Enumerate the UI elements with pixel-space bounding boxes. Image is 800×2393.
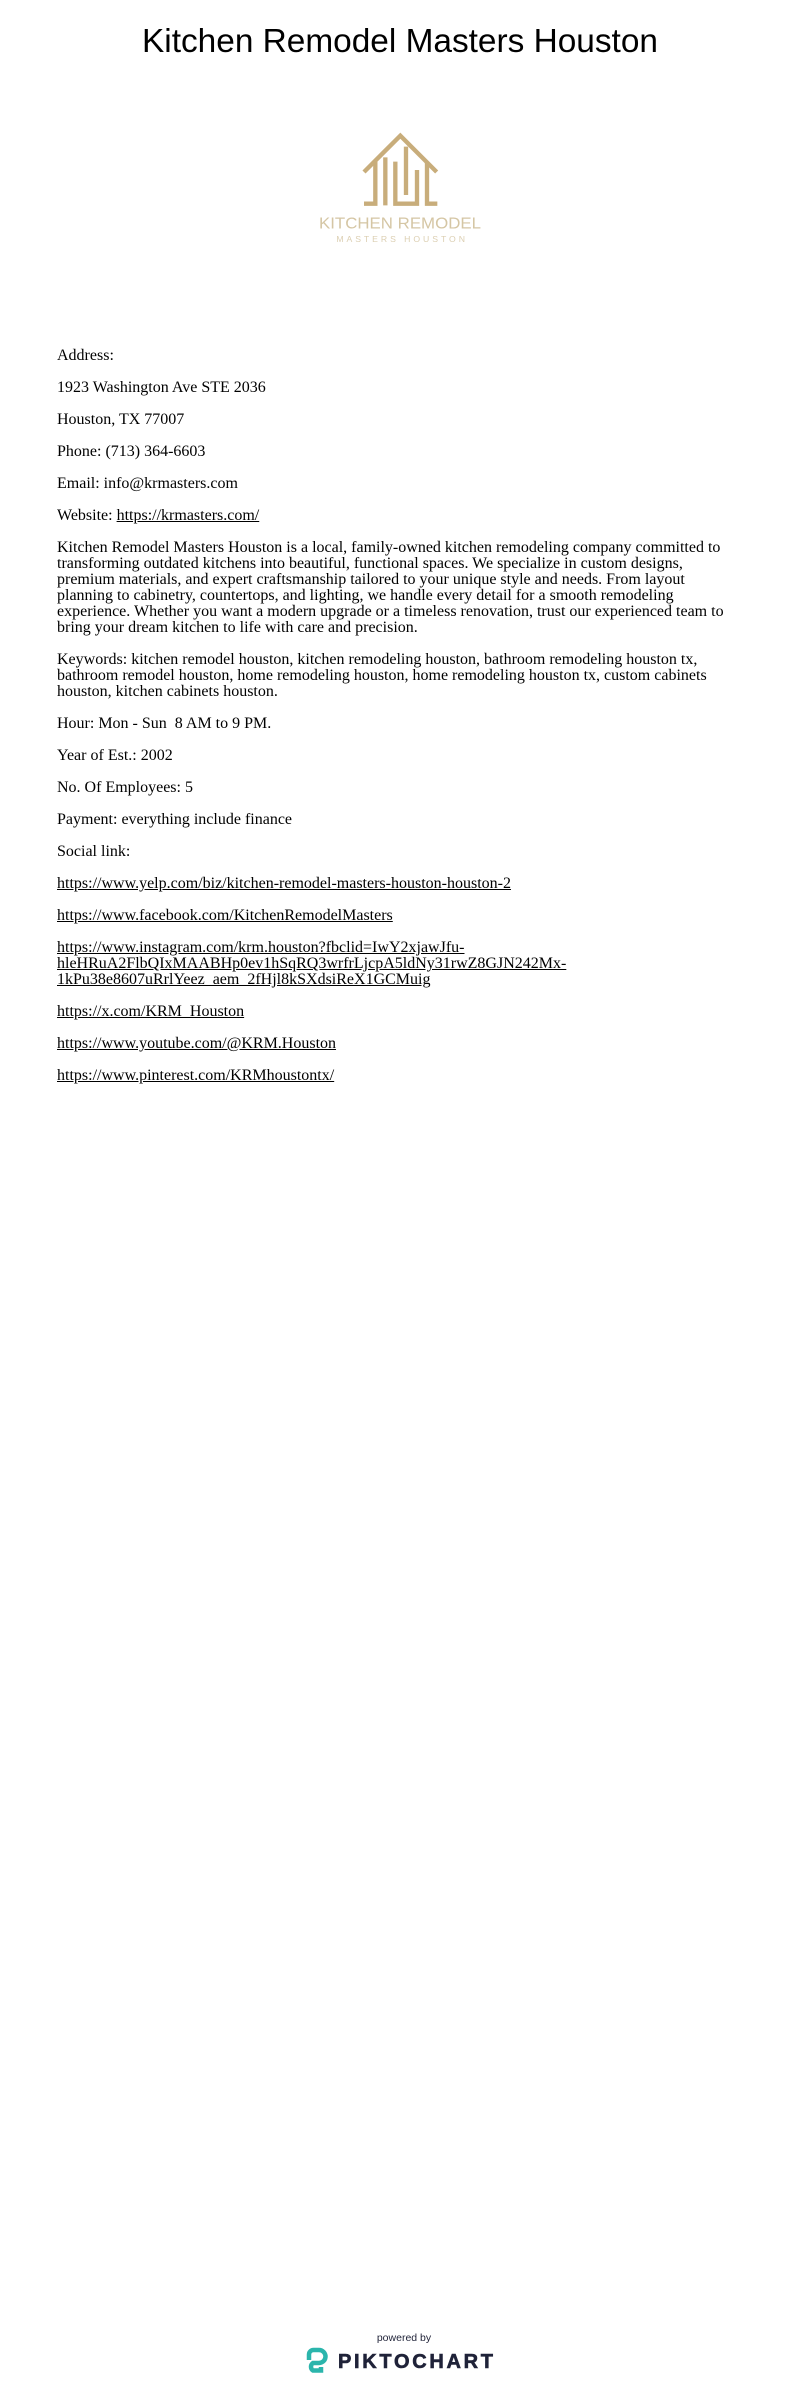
text block: business details: https://www.yelp.com/biz/kitchen-remodel-masters-houston-houston-2 xyxy=(57,875,511,892)
text block: business details: transforming outdated kitchens into beautiful, functional spaces. We specialize in custom designs, xyxy=(57,555,683,572)
text block: business details: bathroom remodel houston, home remodeling houston, home remodeling houston tx, custom cabinets xyxy=(57,667,707,684)
title: Kitchen Remodel Masters Houston xyxy=(142,23,658,60)
text block: business details: https://www.pinterest.com/KRMhoustontx/ xyxy=(57,1067,334,1084)
text block: business details: Houston, TX 77007 xyxy=(57,411,184,428)
text block: business details: Phone: (713) 364-6603 xyxy=(57,443,205,460)
text block: business details: planning to cabinetry, countertops, and lighting, we handle every detail for a smooth remodeling xyxy=(57,587,674,604)
footer: powered by Piktochart: powered by xyxy=(377,2332,432,2344)
text block: business details: Hour: Mon - Sun 8 AM to 9 PM. xyxy=(57,715,271,732)
text block: business details: premium materials, and expert craftsmanship tailored to your unique style and needs. From layout xyxy=(57,571,685,588)
text block: business details xyxy=(57,347,724,1084)
text block: business details: 1kPu38e8607uRrlYeez_aem_2fHjl8kSXdsiReX1GCMuig xyxy=(57,971,430,988)
icon: Piktochart mark xyxy=(309,2350,326,2370)
icon: kitchen remodel logo: KITCHEN REMODEL xyxy=(319,215,481,232)
text block: business details: https://x.com/KRM_Houston xyxy=(57,1003,244,1020)
text block: business details: Payment: everything include finance xyxy=(57,811,292,828)
text block: business details: No. Of Employees: 5 xyxy=(57,779,193,796)
text block: business details: Email: info@krmasters.com xyxy=(57,475,238,492)
text block: business details: Website: https://krmasters.com/ xyxy=(57,507,259,524)
text block: business details: Kitchen Remodel Masters Houston is a local, family-owned kitchen remodeling company committed to xyxy=(57,539,720,556)
text block: business details: houston, kitchen cabinets houston. xyxy=(57,683,278,700)
footer: powered by Piktochart: PIKTOCHART xyxy=(338,2351,493,2373)
text block: business details: Address: xyxy=(57,347,114,364)
text block: business details: https://www.facebook.com/KitchenRemodelMasters xyxy=(57,907,393,924)
text block: business details: Year of Est.: 2002 xyxy=(57,747,173,764)
text block: business details: bring your dream kitchen to life with care and precision. xyxy=(57,619,418,636)
icon: kitchen remodel logo xyxy=(319,132,481,244)
text block: business details: https://www.youtube.com/@KRM.Houston xyxy=(57,1035,336,1052)
icon: kitchen remodel logo: MASTERS HOUSTON xyxy=(336,234,465,244)
text block: business details: Keywords: kitchen remodel houston, kitchen remodeling houston, bathroom remodeling houston tx, xyxy=(57,651,697,668)
text block: business details: Social link: xyxy=(57,843,130,860)
text block: business details: https://www.instagram.com/krm.houston?fbclid=IwY2xjawJfu- xyxy=(57,939,464,956)
text block: business details: hleHRuA2FlbQIxMAABHp0ev1hSqRQ3wrfrLjcpA5ldNy31rwZ8GJN242Mx- xyxy=(57,955,566,972)
text block: business details: 1923 Washington Ave STE 2036 xyxy=(57,379,266,396)
footer: powered by Piktochart xyxy=(306,2332,494,2373)
text block: business details: experience. Whether you want a modern upgrade or a timeless renovation, trust our experienced team to xyxy=(57,603,724,620)
